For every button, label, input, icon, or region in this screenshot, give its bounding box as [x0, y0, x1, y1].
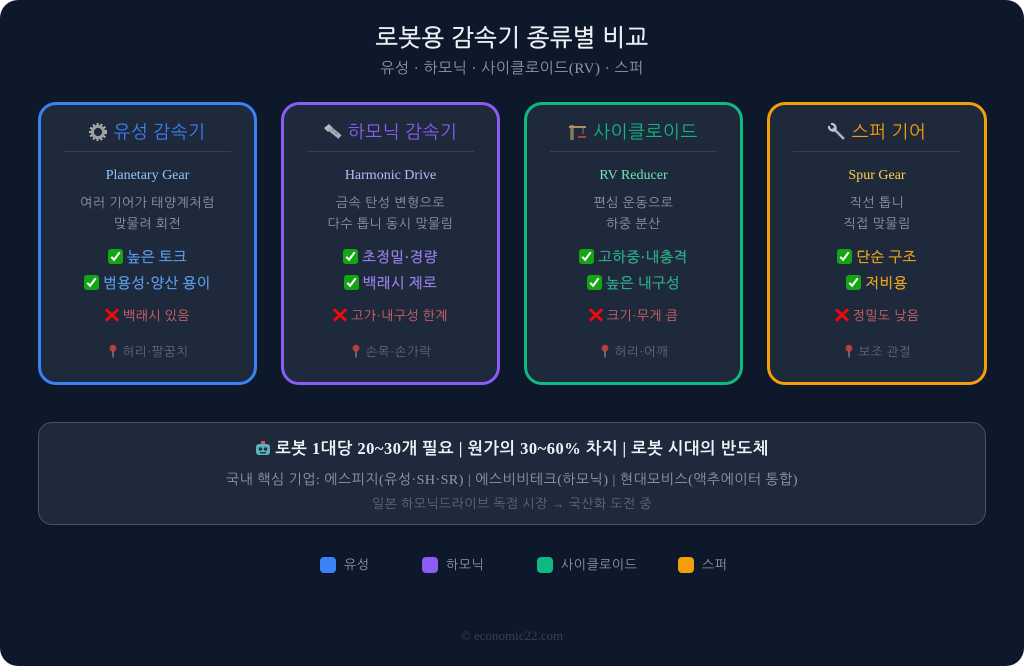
legend: 사이클로이드 — [561, 557, 637, 572]
panel: spur gear — [767, 102, 987, 385]
pro 2 — [846, 275, 908, 292]
companies text: 국내 핵심 기업: 에스피지(유성·SH·SR) | 에스비비테크(하모닉) | 현대모비스(액추에이터 통합) — [226, 473, 798, 488]
panel: harmonic drive — [281, 102, 500, 385]
legend — [320, 557, 727, 573]
english name: RV Reducer — [599, 168, 668, 183]
legend: 스퍼 — [702, 557, 727, 572]
location: 손목·손가락 — [366, 345, 431, 359]
english name: Harmonic Drive — [345, 168, 436, 183]
legend: 유성 — [344, 557, 369, 572]
con: 크기·무게 큼 — [607, 308, 678, 323]
pro 1: 단순 구조 — [856, 250, 917, 266]
footer: © economic22.com — [461, 628, 563, 643]
pro 2: 범용성·양산 용이 — [103, 276, 211, 292]
heading: harmonic: 하모닉 감속기 — [348, 122, 457, 142]
con: 고가·내구성 한계 — [351, 308, 448, 323]
location: 보조 관절 — [859, 345, 911, 359]
heading: spur: 스퍼 기어 — [852, 122, 926, 142]
panel: cycloidal: 하중 분산 — [606, 216, 661, 231]
pro 1: 초정밀·경량 — [362, 250, 438, 266]
description: 직선 톱니 — [850, 195, 904, 210]
panel: harmonic drive: 다수 톱니 동시 맞물림 — [328, 216, 453, 231]
panel: planetary gear: 맞물려 회전 — [114, 216, 181, 231]
english name: Planetary Gear — [106, 168, 189, 183]
pro 2: 백래시 제로 — [363, 276, 437, 292]
market note: 일본 하모닉드라이브 독점 시장 → 국산화 도전 중 — [372, 496, 652, 511]
pro 1: 높은 토크 — [127, 250, 187, 266]
description: 편심 운동으로 — [593, 195, 674, 210]
location: 허리·어깨 — [615, 345, 668, 359]
con: 백래시 있음 — [123, 308, 190, 323]
heading: cycloidal: 사이클로이드 — [593, 122, 698, 142]
description: 여러 기어가 태양계처럼 — [80, 195, 215, 210]
location: 허리·팔꿈치 — [123, 345, 188, 359]
description: 금속 탄성 변형으로 — [336, 195, 445, 210]
con: 정밀도 낮음 — [853, 308, 919, 323]
panel: summary — [38, 422, 986, 525]
title: 로봇용 감속기 종류별 비교 — [375, 26, 649, 52]
panel: spur gear: 직접 맞물림 — [843, 216, 911, 231]
pro 2: 저비용 — [865, 276, 908, 292]
summary headline: 로봇 1대당 20~30개 필요 | 원가의 30~60% 차지 | 로봇 시대의 반도체 — [275, 439, 769, 458]
panel: cycloidal — [524, 102, 743, 385]
pro 1: 고하중·내충격 — [598, 250, 688, 266]
panel: planetary gear — [38, 102, 257, 385]
legend: 하모닉 — [446, 557, 484, 572]
heading: planetary: 유성 감속기 — [113, 122, 206, 142]
english name: Spur Gear — [848, 168, 906, 183]
subtitle: 유성 · 하모닉 · 사이클로이드(RV) · 스퍼 — [380, 61, 644, 77]
pro 2: 높은 내구성 — [606, 276, 680, 292]
